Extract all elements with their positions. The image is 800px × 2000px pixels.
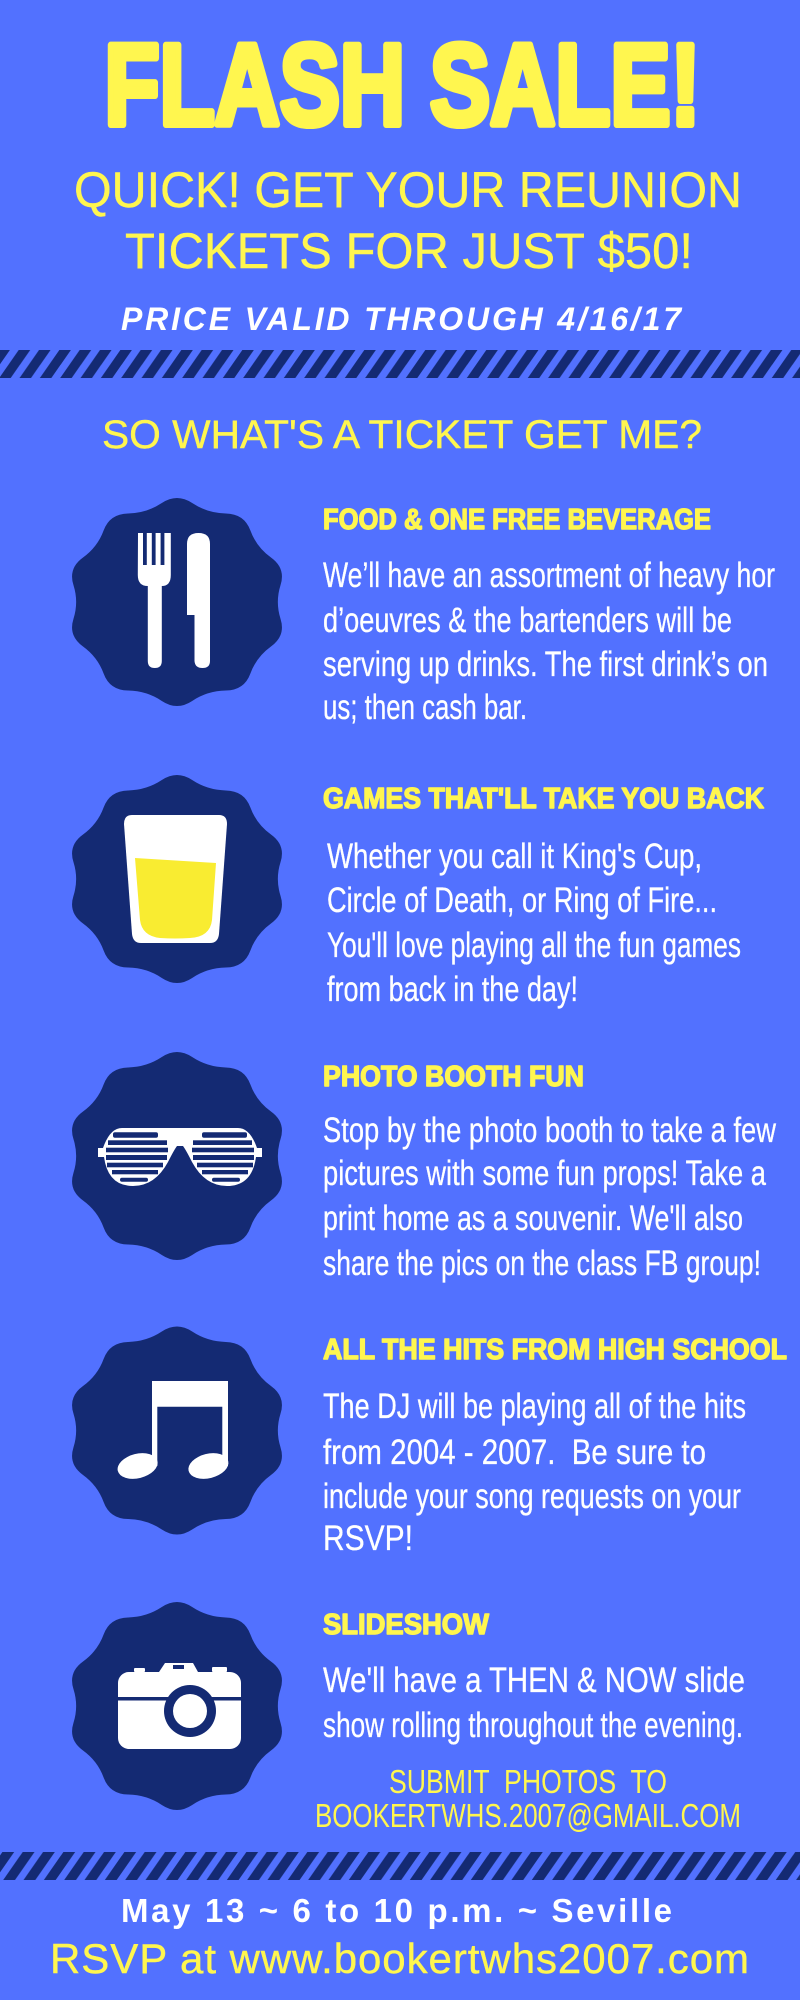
panel: music (72, 1327, 787, 1558)
text: music description: RSVP! (323, 1519, 413, 1558)
text: food description (323, 556, 775, 727)
text: music description: from 2004 - 2007. Be sure to (323, 1433, 706, 1472)
panel: food and beverage (72, 498, 775, 727)
callout: submit photos: SUBMIT PHOTOS TO (389, 1763, 667, 1800)
heading: photo booth: PHOTO BOOTH FUN (323, 1061, 584, 1093)
text: games description: from back in the day! (327, 970, 578, 1009)
text: food description: us; then cash bar. (323, 688, 527, 727)
heading: games: GAMES THAT'LL TAKE YOU BACK (323, 783, 764, 815)
panel: slideshow (72, 1602, 745, 1834)
icon: fork and knife (72, 498, 282, 706)
heading: slideshow: SLIDESHOW (323, 1609, 490, 1641)
text: games description (327, 837, 741, 1009)
panel: photo booth (72, 1052, 777, 1283)
subtitle (74, 162, 742, 279)
subtitle: TICKETS FOR JUST $50! (125, 223, 693, 279)
rsvp link: RSVP at www.bookertwhs2007.com (50, 1935, 749, 1982)
section heading: SO WHAT'S A TICKET GET ME? (102, 413, 702, 457)
icon: drink glass (72, 775, 282, 983)
text: photo booth description (323, 1111, 777, 1283)
panel: games (72, 775, 764, 1009)
text: games description: Whether you call it King's Cup, (327, 837, 702, 876)
heading: food: FOOD & ONE FREE BEVERAGE (323, 504, 711, 536)
icon: music notes (72, 1327, 282, 1534)
callout: submit photos (315, 1763, 741, 1834)
event details: May 13 ~ 6 to 10 p.m. ~ Seville (121, 1892, 672, 1929)
price validity note: PRICE VALID THROUGH 4/16/17 (121, 301, 683, 337)
icon: shutter sunglasses (72, 1052, 282, 1260)
text: slideshow description (323, 1661, 745, 1745)
text: music description (323, 1387, 746, 1558)
subtitle: QUICK! GET YOUR REUNION (74, 162, 742, 218)
icon: camera (72, 1602, 282, 1810)
